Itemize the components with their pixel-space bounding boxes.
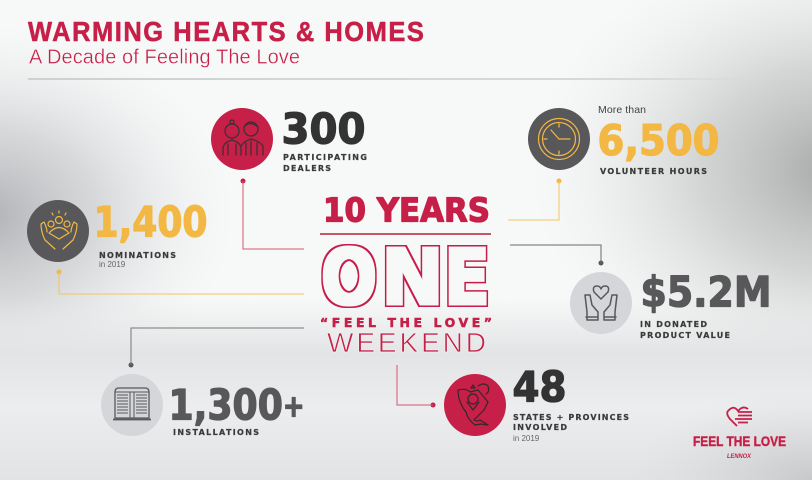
heading: weekend: WEEKEND <box>327 327 486 358</box>
heading: feel the love: “FEEL THE LOVE” <box>320 315 492 330</box>
subtitle: A Decade of Feeling The Love <box>29 46 300 68</box>
heading: one outlined: O <box>321 234 377 323</box>
icon: air conditioner unit <box>101 374 163 436</box>
value: 300 <box>282 104 366 154</box>
heading: one outlined <box>321 234 490 323</box>
label <box>283 153 367 173</box>
connector: donated value <box>510 245 604 266</box>
icon: heart with stripes <box>727 407 752 426</box>
stat: installations <box>101 374 305 437</box>
stat: volunteer hours <box>528 104 720 176</box>
label: PRODUCT VALUE <box>640 331 730 340</box>
icon: two people <box>211 108 273 170</box>
value: 1,400 <box>94 198 208 246</box>
label: DEALERS <box>283 164 331 173</box>
note: More than <box>598 104 646 116</box>
value: 6,500 <box>598 116 720 165</box>
label <box>513 413 629 443</box>
icon: north america map with pin <box>444 374 506 436</box>
label: in 2019 <box>99 260 126 269</box>
heading: one outlined: E <box>444 234 490 323</box>
icon: hands and heart <box>570 272 632 334</box>
sub brand: LENNOX <box>727 454 752 460</box>
value: 48 <box>512 362 566 412</box>
connector: installations <box>128 328 304 368</box>
central headline <box>320 190 492 358</box>
value: 1,300 <box>168 380 301 430</box>
connector: nominations <box>56 270 304 294</box>
connector: volunteer hours <box>508 178 562 220</box>
icon: hands holding people <box>27 200 89 262</box>
icon: clock <box>528 108 590 170</box>
label <box>99 251 176 269</box>
stat: participating dealers <box>211 104 367 173</box>
label: INSTALLATIONS <box>173 428 259 437</box>
value: + <box>283 390 305 424</box>
label: INVOLVED <box>513 423 567 432</box>
label: VOLUNTEER HOURS <box>600 167 707 176</box>
value: $5.2M <box>640 268 772 316</box>
label: NOMINATIONS <box>99 251 176 260</box>
connector: states <box>397 365 436 408</box>
stat: states and provinces <box>444 362 629 443</box>
connector: dealers <box>240 178 304 249</box>
heading: one outlined: N <box>381 234 444 323</box>
logo: feel the love <box>693 407 786 460</box>
label: IN DONATED <box>640 320 707 329</box>
stat: nominations <box>27 198 208 269</box>
title: WARMING HEARTS & HOMES <box>28 16 424 47</box>
label: STATES + PROVINCES <box>513 413 629 422</box>
label: PARTICIPATING <box>283 153 367 162</box>
stat: donated product value <box>570 268 772 340</box>
label: in 2019 <box>513 434 540 443</box>
wordmark: FEEL THE LOVE <box>693 434 786 449</box>
heading: 10 years: 10 YEARS <box>323 190 490 230</box>
label <box>640 320 730 340</box>
